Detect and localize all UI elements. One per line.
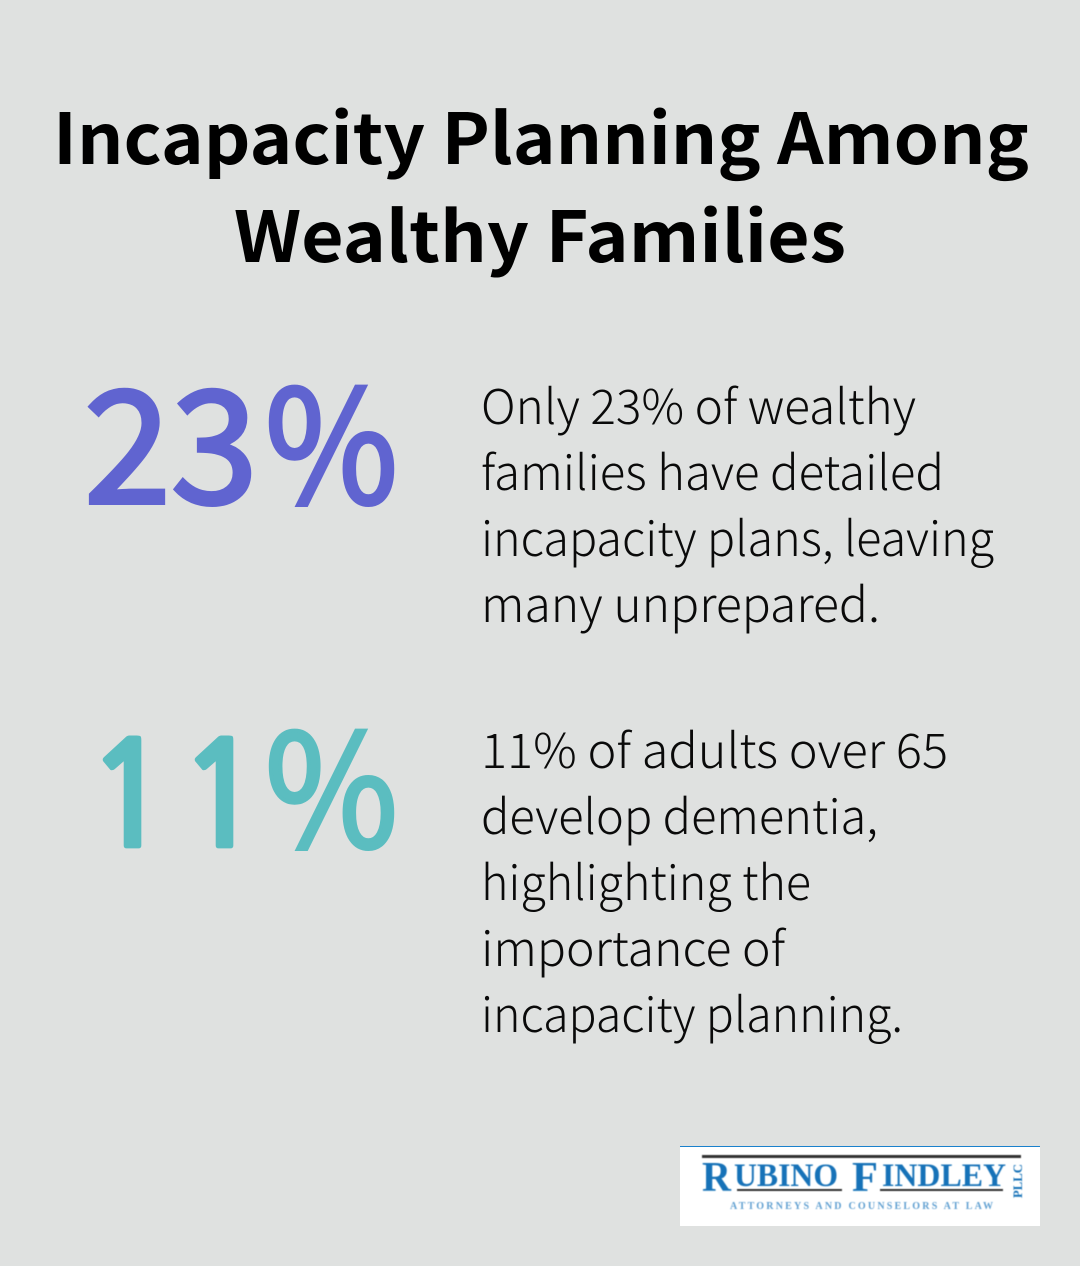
title: Incapacity Planning Among <box>53 84 1029 185</box>
logo: Rubino Findley <box>680 1146 1040 1226</box>
text: 23% description: many unprepared. <box>481 566 880 636</box>
stat: 23%: 23 <box>84 322 258 548</box>
logo: Rubino Findley: INDLEY <box>882 1158 1006 1194</box>
text: 23% description <box>481 368 994 636</box>
title <box>53 84 1029 283</box>
text: 11% description: 11% of adults over 65 <box>481 712 948 782</box>
text: 11% description: incapacity planning. <box>481 976 903 1046</box>
stat: 11%: % <box>265 666 398 892</box>
text: 23% description: Only 23% of wealthy <box>481 368 916 438</box>
logo: Rubino Findley: R <box>702 1155 732 1201</box>
logo: Rubino Findley: PLLC <box>1010 1164 1025 1198</box>
stat: 11% <box>85 666 398 892</box>
stat: 23% <box>84 322 398 548</box>
stat: 11%: 11 <box>85 724 265 869</box>
text: 23% description: families have detailed <box>481 434 944 504</box>
title: Wealthy Families <box>234 182 846 283</box>
text: 11% description <box>481 712 948 1046</box>
text: 11% description: importance of <box>481 910 787 980</box>
text: 11% description: highlighting the <box>481 844 811 914</box>
logo: Rubino Findley: ATTORNEYS AND COUNSELORS AT LAW <box>730 1201 993 1212</box>
logo: Rubino Findley: UBINO <box>734 1158 838 1194</box>
text: 23% description: incapacity plans, leaving <box>481 500 994 570</box>
logo: Rubino Findley: F <box>852 1155 878 1201</box>
text: 11% description: develop dementia, <box>481 778 878 848</box>
stat: 23%: % <box>265 322 398 548</box>
